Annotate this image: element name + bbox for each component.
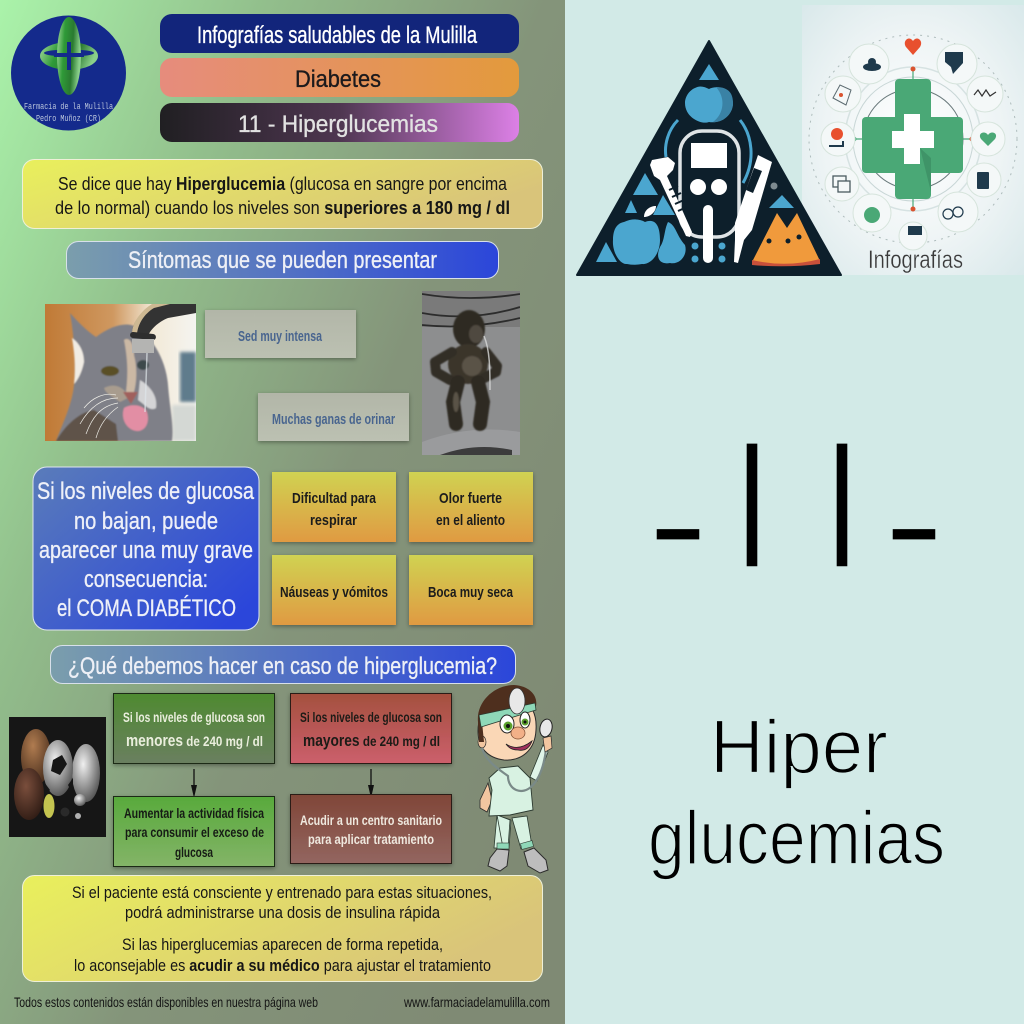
icon: medical cross with health icons xyxy=(802,5,1024,275)
warning box: diabetic coma: el COMA DIABÉTICO xyxy=(57,595,236,622)
action box: below 240 mg/dl: Si los niveles de glucosa son xyxy=(123,710,265,725)
warning box: diabetic coma: aparecer una muy grave xyxy=(39,537,253,564)
footer website: www.farmaciadelamulilla.com xyxy=(403,994,550,1010)
footer note: Todos estos contenidos están disponibles en nuestra página web xyxy=(14,994,318,1010)
number: 11 drawn as bars between dashes: | xyxy=(825,420,859,566)
symptom card: Olor fuerte en el aliento xyxy=(409,472,533,542)
action box: above 240 mg/dl xyxy=(290,694,452,764)
title pill: series name xyxy=(160,14,519,53)
symptom label: Sed muy intensa xyxy=(205,310,356,358)
action box: increase physical activity xyxy=(114,796,274,866)
logo: Farmacia de la Mulilla: Farmacia de la Mulilla xyxy=(24,101,113,112)
title pill: 11 - Hiperglucemias xyxy=(160,103,519,142)
definition box: Se dice que hay Hiperglucemia (glucosa en sangre por encima xyxy=(58,174,508,194)
action box: below 240 mg/dl: menores de 240 mg / dl xyxy=(126,732,263,750)
symptom label: Muchas ganas de orinar: Muchas ganas de orinar xyxy=(272,412,395,428)
action box: go to a health centre: para aplicar tratamiento xyxy=(308,832,434,847)
advice box: Si las hiperglucemias aparecen de forma repetida, xyxy=(122,935,443,954)
number: 11 drawn as bars between dashes: - xyxy=(885,450,943,597)
symptom label: Sed muy intensa: Sed muy intensa xyxy=(238,329,323,345)
definition box xyxy=(22,160,542,228)
arrow: right flow xyxy=(368,769,374,798)
heading: what to do: ¿Qué debemos hacer en caso de hiperglucemia? xyxy=(68,653,497,680)
warning box: diabetic coma xyxy=(33,467,259,630)
big title: Hiperglucemias: glucemias xyxy=(648,796,945,881)
symptom card: Olor fuerte en el aliento: Olor fuerte xyxy=(439,490,502,507)
logo: Farmacia de la Mulilla: Pedro Muñoz (CR) xyxy=(36,113,101,124)
action box: go to a health centre xyxy=(290,794,452,864)
big title: Hiperglucemias: Hiper xyxy=(710,705,888,790)
action box: above 240 mg/dl: Si los niveles de glucosa son xyxy=(300,710,442,725)
symptom card: Náuseas y vómitos: Náuseas y vómitos xyxy=(280,584,388,601)
icon: diabetes triangle xyxy=(577,41,841,275)
number: 11 drawn as bars between dashes: - xyxy=(649,450,707,597)
action box: increase physical activity: glucosa xyxy=(175,845,213,860)
action box: go to a health centre: Acudir a un centro sanitario xyxy=(300,813,442,828)
symptom card: Olor fuerte en el aliento: en el aliento xyxy=(436,512,505,529)
heading: symptoms xyxy=(66,242,498,278)
warning box: diabetic coma: no bajan, puede xyxy=(74,508,218,535)
warning box: diabetic coma: consecuencia: xyxy=(84,566,208,593)
photo: sports balls xyxy=(9,717,106,837)
action box: below 240 mg/dl xyxy=(114,694,274,764)
symptom card: Náuseas y vómitos xyxy=(272,555,396,625)
symptom card: Boca muy seca xyxy=(409,555,533,625)
symptom card: Boca muy seca: Boca muy seca xyxy=(428,584,514,601)
warning box: diabetic coma: Si los niveles de glucosa xyxy=(37,478,255,505)
logo: Farmacia de la Mulilla xyxy=(11,16,126,130)
advice box: Si el paciente está consciente y entrenado para estas situaciones, xyxy=(72,883,492,902)
advice box xyxy=(22,876,542,982)
big title: Hiperglucemias xyxy=(648,705,945,881)
right panel background xyxy=(565,0,1024,1024)
action box: above 240 mg/dl: mayores de 240 mg / dl xyxy=(303,732,440,750)
heading: what to do xyxy=(50,646,516,684)
symptom label: Muchas ganas de orinar xyxy=(258,393,409,441)
title pill: Diabetes: Diabetes xyxy=(295,66,381,93)
advice box: lo aconsejable es acudir a su médico para ajustar el tratamiento xyxy=(74,956,491,975)
number: 11 drawn as bars between dashes: | xyxy=(735,420,769,566)
title pill: series name: Infografías saludables de la Mulilla xyxy=(197,22,477,49)
action box: increase physical activity: para consumir el exceso de xyxy=(125,825,264,840)
definition box: de lo normal) cuando los niveles son superiores a 180 mg / dl xyxy=(55,198,510,218)
heading: symptoms: Síntomas que se pueden presentar xyxy=(128,247,437,274)
title pill: 11 - Hiperglucemias: 11 - Hiperglucemias xyxy=(238,111,438,138)
photo: Manneken Pis statue xyxy=(422,291,520,455)
title pill: Diabetes xyxy=(160,58,519,97)
photo: cat drinking from tap xyxy=(45,304,196,441)
icon: medical cross with health icons: Infografías xyxy=(868,246,963,274)
arrow: left flow xyxy=(191,769,197,798)
action box: increase physical activity: Aumentar la actividad física xyxy=(124,806,264,821)
number: 11 drawn as bars between dashes xyxy=(649,420,943,597)
symptom card: Dificultad para respirar: Dificultad para xyxy=(292,490,377,507)
advice box: podrá administrarse una dosis de insulina rápida xyxy=(125,903,440,922)
left panel background xyxy=(0,0,565,1024)
illustration: cartoon doctor xyxy=(478,685,554,873)
symptom card: Dificultad para respirar xyxy=(272,472,396,542)
symptom card: Dificultad para respirar: respirar xyxy=(310,512,357,529)
